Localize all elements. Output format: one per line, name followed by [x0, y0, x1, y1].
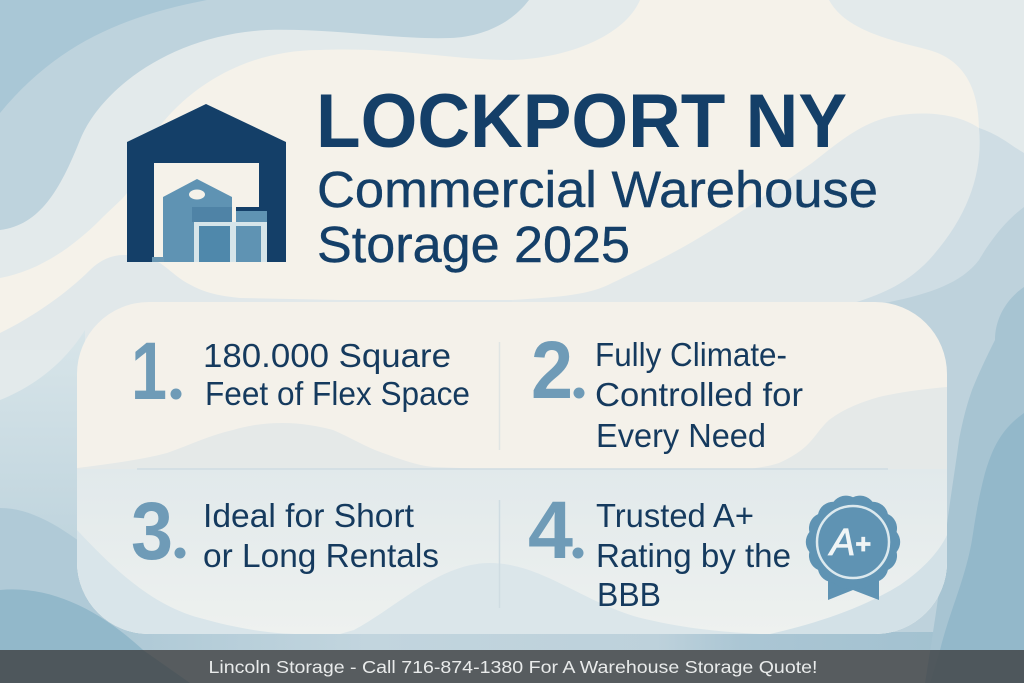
number 2: 2: [531, 325, 573, 416]
text 4: Rating by the: [596, 537, 791, 574]
number 4: 4: [528, 485, 573, 576]
text 3: or Long Rentals: [203, 537, 439, 574]
text 2: Fully Climate-: [595, 336, 787, 373]
footer bar: Lincoln Storage - Call 716-874-1380 For A Warehouse Storage Quote!: [208, 657, 818, 677]
item 4: [528, 485, 791, 613]
icon: A+ badge: A: [830, 522, 855, 564]
heading: Storage 2025: Storage 2025: [317, 216, 630, 273]
item 3: [131, 486, 439, 577]
text 4: Trusted A+: [596, 497, 754, 534]
text 2: Controlled for: [595, 376, 803, 413]
heading: Commercial Warehouse: Commercial Warehouse: [317, 161, 878, 218]
text 1: 180.000 Square: [203, 337, 451, 374]
icon: A+ badge: [806, 496, 900, 600]
text 3: Ideal for Short: [203, 497, 414, 534]
number 3: 3: [131, 486, 173, 577]
item 1: [131, 326, 470, 417]
heading: Lockport NY: LOCKPORT NY: [316, 79, 847, 164]
icon: warehouse: [127, 104, 286, 262]
item 2: [531, 325, 803, 454]
text 1: Feet of Flex Space: [205, 375, 470, 412]
number 1: 1: [131, 326, 167, 417]
icon: A+ badge: +: [855, 529, 871, 559]
footer bar: [0, 650, 1024, 683]
text 2: Every Need: [596, 417, 766, 454]
title: [316, 79, 878, 273]
panel: features: [77, 302, 947, 634]
text 4: BBB: [597, 576, 661, 613]
